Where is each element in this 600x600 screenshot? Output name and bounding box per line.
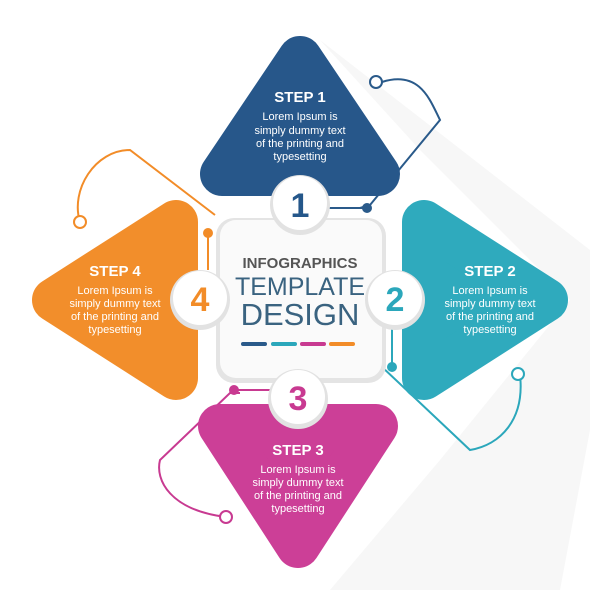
- panel: step 1 (blue triangle): of the printing and: [256, 138, 344, 150]
- connector lines: [78, 79, 521, 517]
- panel: step 1 (blue triangle): Lorem Ipsum is: [262, 111, 338, 123]
- panel: step 4 (orange triangle): STEP 4: [89, 263, 141, 280]
- panel: step 4 (orange triangle): typesetting: [88, 324, 142, 336]
- long shadow: [320, 40, 590, 590]
- panel: step 2 (teal triangle): [424, 222, 546, 378]
- number circles: 3: [289, 380, 307, 418]
- panel: step 4 (orange triangle): [54, 222, 176, 378]
- panel: step 1 (blue triangle): STEP 1: [274, 89, 326, 106]
- number circles: 1: [291, 187, 309, 225]
- panel: step 1 (blue triangle): [222, 58, 378, 174]
- center panel: [216, 218, 386, 383]
- panel: step 4 (orange triangle): Lorem Ipsum is: [77, 285, 153, 297]
- center panel: TEMPLATE: [235, 273, 365, 301]
- panel: step 2 (teal triangle): STEP 2: [464, 263, 516, 280]
- panel: step 1 (blue triangle): simply dummy text: [254, 125, 346, 137]
- number circles: 4: [191, 281, 210, 319]
- color legend dashes: [243, 342, 353, 346]
- center panel: DESIGN: [241, 297, 359, 332]
- panel: step 3 (magenta triangle): [220, 426, 376, 546]
- panel: step 3 (magenta triangle): typesetting: [271, 503, 325, 515]
- panel: step 4 (orange triangle): of the printing and: [71, 311, 159, 323]
- panel: step 3 (magenta triangle): simply dummy text: [252, 477, 344, 489]
- title: INFOGRAPHICS: [242, 255, 358, 272]
- panel: step 1 (blue triangle): typesetting: [273, 151, 327, 163]
- panel: step 2 (teal triangle): simply dummy text: [444, 298, 536, 310]
- number circles: 2: [386, 281, 404, 319]
- panel: step 3 (magenta triangle): Lorem Ipsum is: [260, 464, 336, 476]
- panel: step 2 (teal triangle): Lorem Ipsum is: [452, 285, 528, 297]
- panel: step 3 (magenta triangle): STEP 3: [272, 442, 324, 459]
- panel: step 2 (teal triangle): typesetting: [463, 324, 517, 336]
- panel: step 3 (magenta triangle): of the printing and: [254, 490, 342, 502]
- number circles: [170, 175, 425, 429]
- panel: step 4 (orange triangle): simply dummy text: [69, 298, 161, 310]
- panel: step 2 (teal triangle): of the printing and: [446, 311, 534, 323]
